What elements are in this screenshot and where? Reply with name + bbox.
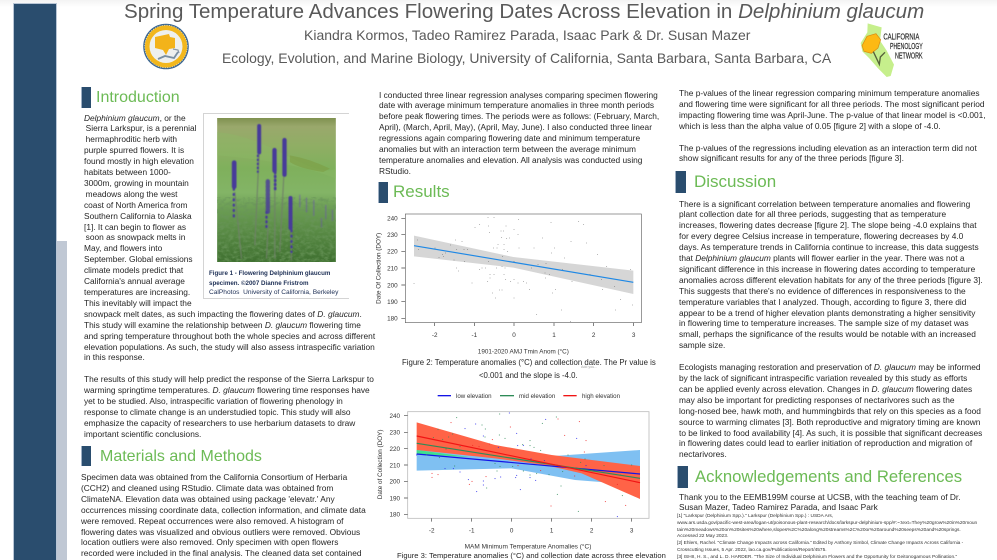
text: analysis methods continued: anomalies but with an interaction term between the average minimum	[379, 144, 636, 154]
text: materials and methods: were removed. Repeat occurrences were also removed. A histogram of	[81, 516, 344, 526]
text: materials and methods: flowering dates was visualized and obvious outliers were removed. Obvious	[81, 527, 360, 537]
chart: Figure 3 elevation regressions: 200	[389, 479, 400, 486]
chart: Figure 3 elevation regressions: -1	[469, 528, 475, 535]
heading: Introduction: Introduction	[96, 89, 180, 106]
icon: California Phenology Network logo	[860, 23, 923, 77]
chart: Figure 3 elevation regressions: 240	[389, 413, 400, 420]
text: discussion: to be linked to food availability [4]. As such, it is possible that significant decreases	[679, 428, 982, 438]
text: introduction: yet to be studied. Also, intraspecific variation of flowering phenology in	[84, 396, 343, 406]
icon: California Phenology Network logo: NETWORK	[895, 52, 923, 61]
text: discussion: source to warming climates [3]. Both reproductive and migratory timing are known	[679, 417, 980, 427]
text: introduction: September. Global emissions	[84, 254, 193, 264]
legend: high elevation	[582, 393, 621, 400]
sidebar: dark blue band	[14, 4, 56, 560]
text: acknowledgements: Thank you to the EEMB199M course at UCSB, with the teaching team of Dr.	[679, 492, 961, 502]
chart: Figure 3 elevation regressions: 230	[389, 430, 400, 437]
text: introduction: purple spurred flowers. It is	[84, 145, 184, 155]
text: introduction: 3000m, growing in mountain	[84, 178, 189, 188]
text: discussion: nectarivores.	[679, 449, 727, 459]
chart: Figure 3 elevation regressions: Date of Collection (DOY)	[377, 430, 384, 499]
caption: Figure 1	[209, 270, 338, 296]
text: discussion: can be applied evenly across elevation. Changes in D. glaucum flowering dates	[679, 384, 972, 394]
text: introduction: Delphinium glaucum, or the	[84, 112, 186, 122]
text: introduction: and spring temperature throughout both the whole species and across different	[84, 331, 375, 341]
text: introduction: snowpack melt dates, as such impacting the flowering dates of D. glaucum.	[84, 309, 362, 319]
heading: Results: Results	[393, 182, 450, 201]
text: introduction: coast of North America from	[84, 200, 187, 210]
text: results p-values: which is less than the alpha value of 0.05 [figure 2] with a slope of -4.0.	[679, 121, 941, 131]
chart: Figure 3 elevation regressions: 1	[550, 528, 554, 535]
text: introduction: Sierra Larkspur, is a perennial	[86, 123, 197, 133]
caption: Figure 1: CalPhotos University of California, Berkeley	[209, 289, 338, 296]
text: references: [1] "Larkspur (Delphinium Spp.)." Larkspur (Delphinium Spp.) : USDA Ars,	[677, 514, 833, 519]
text: discussion: Ecologists managing restoration and preservation of D. glaucum may be informed	[679, 362, 980, 372]
text: references: Crosscutting Issues, 5 Apr. 2022, lao.ca.gov/Publications/Report/4575.	[677, 548, 827, 553]
text: discussion: sample size.	[679, 340, 725, 350]
text: discussion: may also be important for predicting responses of nectarivores such as the	[679, 395, 954, 405]
text: analysis methods continued: date with average minimum temperature anomalies in three month periods	[379, 100, 654, 110]
chart: Figure 3 elevation regressions: 210	[389, 462, 400, 469]
chart: Figure 3 elevation regressions: 0	[510, 528, 514, 535]
text: acknowledgements	[679, 492, 961, 512]
icon: UC seal	[143, 24, 189, 70]
chart: Figure 2 scatter with regression: 210	[387, 265, 398, 272]
chart: Figure 3 elevation regressions: 180	[389, 512, 400, 519]
text: references	[677, 514, 977, 560]
text: references: www.ars.usda.gov/pacific-west-area/logan-ut/poisonous-plant-research/docs/larkspur-delphinium-spp/#:~:text=They%20grow%20in%20moun	[677, 521, 977, 526]
chart: Figure 2 scatter with regression: 200	[387, 282, 398, 289]
heading: Materials and Methods: Materials and Methods	[100, 448, 262, 465]
heading bar: Materials and Methods	[81, 446, 91, 466]
text: results p-values	[679, 88, 986, 163]
chart: Figure 2 scatter with regression: -2	[432, 332, 438, 339]
legend: mid elevation	[519, 393, 556, 400]
text: references: [3] ISHII, H. S., and L. D. HARDER. "The Size of Individual Delphinium Flowers and the Opportunity for Geitonogamous Pollination."	[677, 555, 957, 560]
text: materials and methods: ClimateNA. Elevation data was obtained using package 'elevatr.' Any	[81, 494, 335, 504]
chart: Figure 2 scatter with regression: 3	[632, 332, 636, 339]
text: introduction: in this response.	[84, 352, 145, 362]
chart: Figure 3 elevation regressions: MAM Minimum Temperature Anomalies (°C)	[465, 543, 591, 551]
text: introduction: California's annual average	[84, 276, 185, 286]
stray placeholder text: Add you...	[581, 365, 597, 369]
chart: Figure 2 scatter with regression: 220	[387, 249, 398, 256]
text: results p-values: The p-values of the linear regression comparing minimum temperature anomalies	[679, 88, 980, 98]
photo: flowering Delphinium glaucum	[217, 118, 336, 262]
chart: Figure 2 scatter with regression: Date Of Collection (DOY)	[375, 233, 382, 304]
text: results p-values: show significant results for any of the three periods [figure 3].	[679, 153, 904, 163]
text: introduction: This study will examine the relationship between D. glaucum flowering time	[84, 320, 361, 330]
text: introduction: climate models predict that	[84, 265, 183, 275]
text: introduction: found mostly in high elevation	[84, 156, 194, 166]
text: introduction: Southern California to Alaska	[84, 211, 192, 221]
chart: Figure 2 scatter with regression: 230	[387, 232, 398, 239]
text: references: tain%20meadows%20on%20sites%20where,slopes%2C%20along%20streams%2C%20or%20around%20seeps%20and%20springs.	[677, 528, 961, 533]
text: analysis methods continued: temperature anomalies and elevation. All analysis was conducted using	[379, 155, 642, 165]
affiliation: Ecology, Evolution, and Marine Biology, University of California, Santa Barbara, Santa Barbara, CA	[222, 50, 831, 66]
text: introduction: [1]. It can begin to flower as	[84, 222, 186, 232]
text: discussion: long-nosed bee, hawk moth, and hummingbirds that rely on this species as a food	[679, 406, 981, 416]
chart: Figure 2 scatter with regression: 0	[512, 332, 516, 339]
text: analysis methods continued: before peak flowering times. The periods were as follows: (February, March,	[379, 111, 659, 121]
text: discussion: temperature variables that I analyzed. Though, according to figure 3, there did	[679, 297, 966, 307]
text: introduction: habitats between 1000-	[84, 167, 171, 177]
chart: Figure 3 elevation regressions: 2	[590, 528, 594, 535]
text: discussion: increases, flowering dates decrease [figure 2]. The slope being -4.0 explains that	[679, 220, 977, 230]
text: introduction: warming springtime temperatures. D. glaucum flowering time responses have	[84, 385, 370, 395]
text: introduction: The results of this study will help predict the response of the Sierra Larkspur to	[84, 374, 374, 384]
caption: Figure 2: Figure 2: Temperature anomalies (°C) and collection date. The Pr value is	[402, 358, 656, 366]
legend: low elevation	[456, 393, 492, 400]
text: references: Accessed 22 May 2023.	[677, 534, 728, 539]
text: acknowledgements: Susan Mazer, Tadeo Ramirez Parada, and Isaac Park	[679, 502, 878, 512]
text: introduction: May, and flowers into	[84, 243, 162, 253]
text: discussion	[679, 198, 983, 459]
text: introduction: important scientific conclusions.	[84, 429, 201, 439]
heading bar: Acknowledgements and References	[677, 466, 688, 488]
text: introduction	[84, 112, 376, 439]
caption: Figure 1: specimen. ©2007 Dianne Fristrom	[209, 280, 308, 287]
text: analysis methods continued: regressions again comparing flowering date and minimum temperature	[379, 133, 640, 143]
authors: Kiandra Kormos, Tadeo Ramirez Parada, Isaac Park & Dr. Susan Mazer	[304, 27, 750, 43]
text: discussion: plant collection date for all three periods, suggesting that as temperature	[679, 209, 946, 219]
text: discussion: days. As temperature trends in California continue to increase, this data suggests	[679, 242, 979, 252]
caption: Figure 2: <0.001 and the slope is -4.0.	[479, 370, 578, 380]
chart: Figure 3 elevation regressions: -2	[429, 528, 435, 535]
text: discussion: by the lack of significant intraspecific variation revealed by this study as efforts	[679, 373, 967, 383]
text: introduction: elevation populations. As such, the study will also assess intraspecific variation	[84, 342, 375, 352]
text: introduction: hermaphroditic herb with	[86, 134, 177, 144]
chart: Figure 3 elevation regressions: 220	[389, 446, 400, 453]
chart: Figure 2 scatter with regression: 180	[387, 316, 398, 323]
icon: California Phenology Network logo: CALIFORNIA	[883, 33, 920, 42]
chart: Figure 2 scatter with regression: 240	[387, 216, 398, 223]
text: results p-values: The p-values of the regressions including elevation as an interaction term did not	[679, 143, 977, 153]
chart: Figure 3 elevation regressions	[377, 393, 650, 551]
text: materials and methods: occurrences missing coordinate data, collection information, and climate data	[81, 505, 366, 515]
chart: Figure 3 elevation regressions: 3	[630, 528, 634, 535]
text: discussion: anomalies across different elevation habitats for any of the three periods [figure 3].	[679, 275, 983, 285]
chart: Figure 3 elevation regressions: 190	[389, 495, 400, 502]
caption: Figure 3: Figure 3: Temperature anomalies (°C) and collection date across three elevation	[397, 550, 666, 560]
text: analysis methods continued: I conducted three linear regression analyses comparing specimen flowering	[379, 90, 658, 100]
text: introduction: emphasize the capacity of researchers to use herbarium datasets to draw	[84, 418, 355, 428]
text: discussion: in flowering dates could lead to earlier initiation of reproduction and migration of	[679, 438, 972, 448]
text: results p-values: and flowering time were significant for all three periods. The most significant period	[679, 99, 984, 109]
heading bar: Results	[378, 182, 388, 203]
text: discussion: for every degree Celsius increase in temperature, flowering decreases by 4.0	[679, 231, 963, 241]
legend	[438, 393, 621, 400]
text: materials and methods: (CCH2) and cleaned using RStudio. Climate data was obtained from	[81, 483, 333, 493]
caption: Figure 2	[402, 358, 656, 380]
icon: California Phenology Network logo: PHENOLOGY	[890, 42, 923, 51]
sidebar: light grey band	[57, 241, 67, 560]
text: analysis methods continued	[379, 90, 659, 176]
text: analysis methods continued: April), (March, April, May), (April, May, June). I also conducted three linear	[379, 122, 652, 132]
text: references: [2] Ehlers, Rachel. "Climate Change Impacts across California." Edited by Anthony Simbol, Climate Change Impacts Across California -	[677, 541, 963, 546]
text: discussion: This suggests that there's no evidence of differences in responsiveness to the	[679, 286, 966, 296]
chart: Figure 2 scatter with regression: -1	[472, 332, 478, 339]
text: discussion: that Delphinium glaucum plants will flower earlier in the year. There was not a	[679, 253, 965, 263]
text: discussion: significant difference in this increase in flowering dates according to temperature	[679, 264, 975, 274]
text: discussion: in flowering time to temperature increases. The sample size of my dataset was	[679, 318, 969, 328]
text: materials and methods: Specimen data was obtained from the California Consortium of Herbaria	[81, 472, 347, 482]
chart: Figure 2 scatter with regression	[375, 214, 642, 355]
title: Spring Temperature Advances Flowering Dates Across Elevation in Delphinium glaucum	[124, 0, 924, 23]
chart: Figure 2 scatter with regression: 1	[552, 332, 556, 339]
text: discussion: There is a significant correlation between temperature anomalies and flowering	[679, 198, 970, 208]
text: discussion: small, perhaps the significance of the results would be notable with an increased	[679, 329, 976, 339]
heading bar: Discussion	[675, 171, 686, 193]
panel: Figure 1 photo with caption	[203, 113, 349, 299]
chart: Figure 2 scatter with regression: 1901-2020 AMJ Tmin Anom (°C)	[478, 347, 569, 355]
text: analysis methods continued: RStudio.	[379, 166, 411, 176]
heading: Acknowledgements and References: Acknowledgements and References	[695, 467, 962, 486]
text: introduction: meadows along the west	[86, 189, 178, 199]
chart: Figure 2 scatter with regression: 190	[387, 299, 398, 306]
text: materials and methods	[81, 472, 366, 558]
text: introduction: response to climate change is an understudied topic. This study will also	[84, 407, 351, 417]
text: materials and methods: location outliers were also removed. Only specimen with open flowers	[81, 537, 338, 547]
chart: Figure 2 scatter with regression: 2	[592, 332, 596, 339]
text: introduction: soon as snowpack melts in	[86, 232, 185, 242]
heading bar: Introduction	[81, 87, 91, 108]
heading: Discussion: Discussion	[694, 172, 776, 191]
text: introduction: This inevitably will impact the	[84, 298, 192, 308]
text: materials and methods: recorded were included in the final analysis. The cleaned data set contained	[81, 548, 361, 558]
text: discussion: appear to be a trend of higher elevation plants demonstrating a higher sensitivity	[679, 308, 975, 318]
caption: Figure 1: Figure 1 - Flowering Delphinium glaucum	[209, 270, 330, 277]
text: results p-values: impacting flowering time was April-June. The p-value of that linear model is <0.001,	[679, 110, 986, 120]
text: introduction: temperatures are increasing.	[84, 287, 190, 297]
